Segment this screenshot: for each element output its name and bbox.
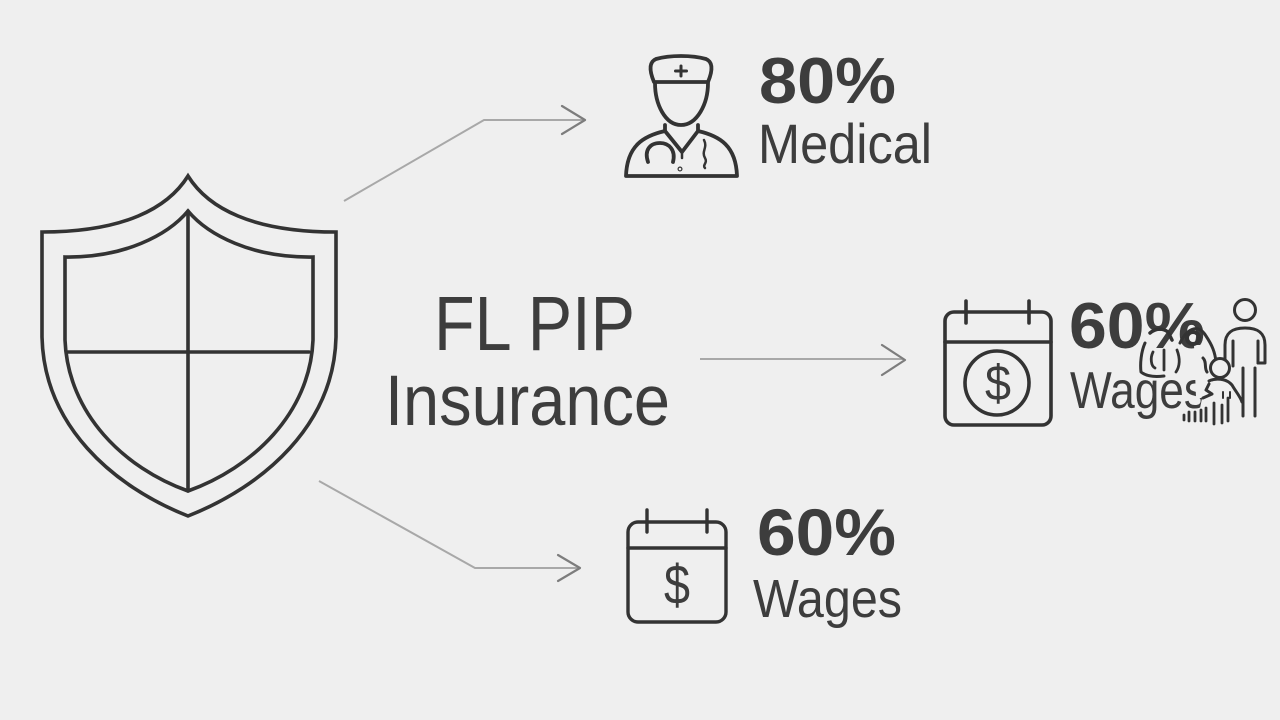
arrow: shield to medical [344,106,585,201]
arrow: shield to lower wages [319,481,580,581]
icon: family [1141,300,1265,424]
value: 60%: 60% [757,495,896,569]
icon: doctor [626,56,737,176]
panel: wages [628,495,902,629]
icon: calendar with dollar [628,510,726,622]
title: FL PIP [434,281,635,367]
panel: wages with family [945,289,1265,425]
title [385,281,670,441]
dollar sign in coin: $ [985,355,1011,411]
value: 60%: 60% [1069,289,1205,362]
arrow: title to wages [700,345,905,375]
title: Insurance [385,362,670,441]
icon: calendar with coin [945,301,1051,425]
label: Medical: Medical [758,112,932,175]
value: 80%: 80% [759,44,896,117]
label: Wages: Wages [753,569,902,629]
dollar sign: $ [664,553,690,616]
label: Wages: Wages [1070,362,1206,420]
panel: medical [626,44,932,176]
icon: shield [42,176,336,516]
